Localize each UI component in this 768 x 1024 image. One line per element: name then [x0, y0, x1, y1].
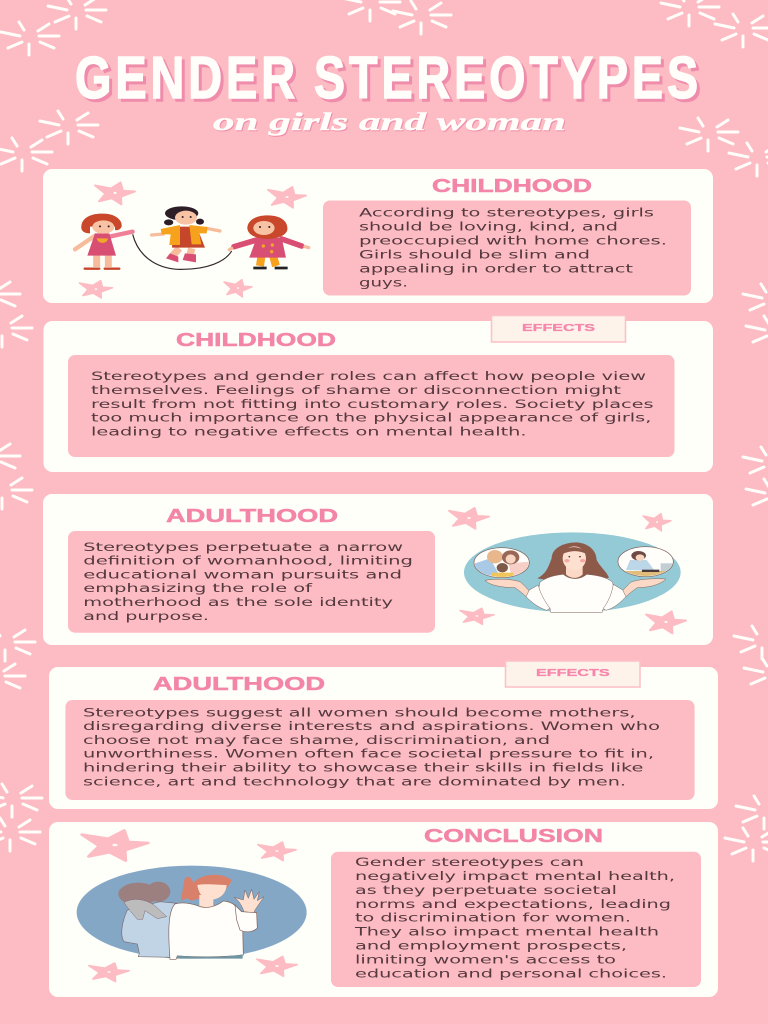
text box: adulthood — [68, 531, 435, 633]
text box: adulthood effects — [65, 700, 695, 800]
heading: adulthood effects: ADULTHOOD — [153, 674, 325, 694]
title — [75, 45, 702, 111]
text box: adulthood: motherhood as the sole identity — [83, 595, 393, 609]
text box: childhood effects — [68, 355, 674, 457]
text box: conclusion: They also impact mental health — [353, 925, 659, 939]
text box: childhood effects: too much importance on the physical appearance of girls, — [91, 411, 651, 425]
effects tag: EFFECTS — [536, 668, 610, 679]
left thought bubble: family — [474, 548, 530, 578]
panel: adulthood stereotypes — [43, 494, 713, 645]
text box: adulthood: emphasizing the role of — [83, 581, 314, 595]
illustration: children skipping rope — [75, 206, 309, 269]
text box: childhood: Girls should be slim and — [359, 248, 590, 262]
stars: conclusion — [82, 830, 297, 982]
text box: adulthood: and purpose. — [83, 609, 209, 623]
text box: conclusion — [331, 852, 701, 987]
title: GENDER — [75, 45, 299, 111]
illustration: two women — [77, 866, 307, 959]
text box: adulthood effects: science, art and technology that are dominated by men. — [83, 775, 626, 789]
text box: childhood: guys. — [359, 276, 408, 290]
text box: conclusion: education and personal choices. — [355, 966, 667, 980]
heading: adulthood: ADULTHOOD — [166, 506, 338, 526]
text box: adulthood: Stereotypes perpetuate a narrow — [83, 540, 403, 554]
text box: adulthood: educational woman pursuits and — [83, 567, 402, 581]
text box: childhood — [323, 200, 691, 296]
woman covering her face — [118, 882, 177, 957]
text box: adulthood effects: disregarding diverse interests and aspirations. Women who — [83, 719, 660, 733]
right thought bubble: career — [618, 547, 673, 578]
text box: adulthood: definition of womanhood, limiting — [83, 553, 413, 567]
woman waving — [169, 875, 264, 959]
text box: adulthood effects: hindering their ability to showcase their skills in fields like — [83, 761, 643, 775]
text box: adulthood effects: Stereotypes suggest all women should become mothers, — [83, 706, 636, 720]
heading: conclusion: CONCLUSION — [424, 826, 603, 846]
stars: adulthood — [449, 508, 686, 633]
illustration: woman balancing family and career — [464, 532, 681, 612]
heading: childhood effects: CHILDHOOD — [176, 330, 336, 350]
text box: conclusion: to discrimination for women. — [355, 911, 631, 925]
text box: conclusion: as they perpetuate societal — [355, 883, 617, 897]
text box: adulthood effects: unworthiness. Women often face societal pressure to fit in, — [83, 747, 654, 761]
stars: childhood — [80, 182, 306, 298]
text box: childhood effects: themselves. Feelings of shame or disconnection might — [91, 383, 622, 397]
text box: conclusion: and employment prospects, — [355, 938, 627, 952]
text box: childhood: According to stereotypes, girls — [359, 206, 654, 220]
effects tag — [492, 316, 626, 342]
text box: conclusion: norms and expectations, leading — [355, 897, 671, 911]
text box: conclusion: limiting women's access to — [355, 952, 616, 966]
panel: childhood stereotypes — [43, 169, 713, 303]
panel: conclusion — [49, 822, 718, 997]
text box: childhood: appealing in order to attract — [359, 262, 634, 276]
panel: adulthood effects — [49, 661, 718, 809]
text box: adulthood effects: choose not may face shame, discrimination, and — [83, 733, 550, 747]
text box: childhood: should be loving, kind, and — [359, 220, 618, 234]
text box: childhood effects: leading to negative effects on mental health. — [91, 425, 526, 439]
text box: childhood effects: Stereotypes and gender roles can affect how people view — [91, 369, 646, 383]
panel: childhood effects — [44, 316, 713, 472]
subtitle: on girls and woman — [213, 109, 566, 136]
text box: childhood: preoccupied with home chores. — [359, 234, 667, 248]
text box: childhood effects: result from not fitting into customary roles. Society places — [91, 397, 654, 411]
effects tag — [506, 661, 640, 687]
text box: conclusion: negatively impact mental health, — [355, 869, 675, 883]
woman figure — [485, 542, 666, 612]
effects tag: EFFECTS — [522, 323, 596, 334]
heading: childhood: CHILDHOOD — [432, 176, 592, 196]
text box: conclusion: Gender stereotypes can — [355, 855, 584, 869]
